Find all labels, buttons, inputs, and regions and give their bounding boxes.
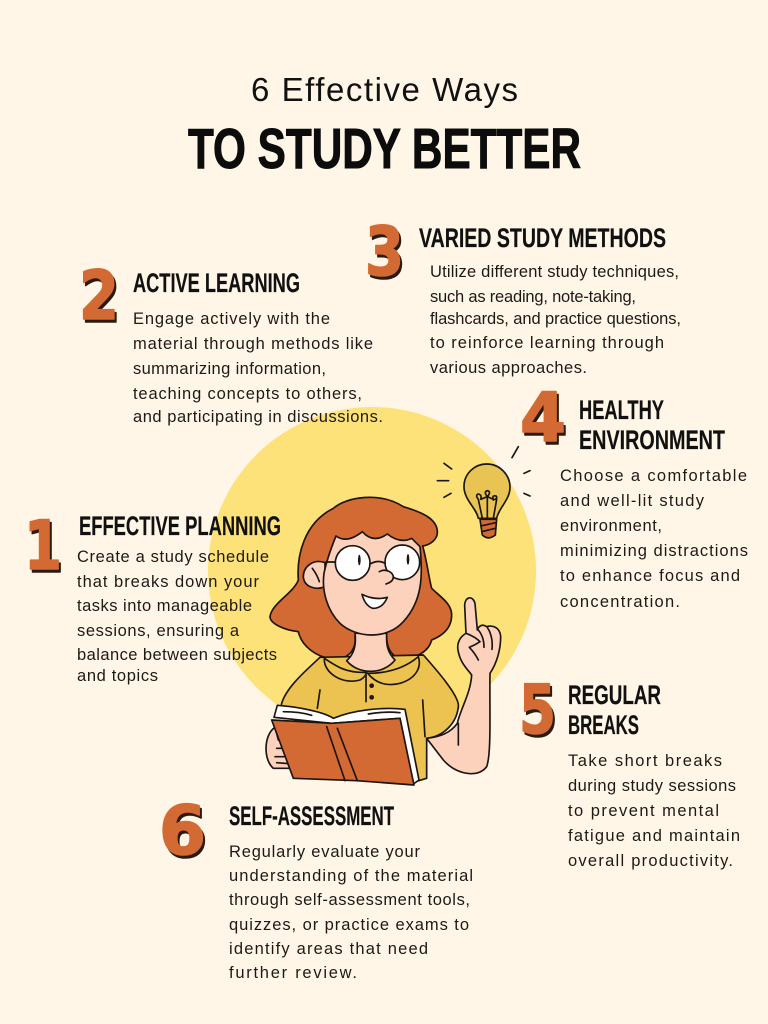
title: TO STUDY BETTER (188, 117, 581, 181)
text 1: balance between subjects (77, 646, 277, 664)
number 3: 3 (365, 213, 404, 292)
heading 2: ACTIVE LEARNING (133, 268, 300, 298)
neck (347, 633, 395, 671)
text 1: that breaks down your (77, 573, 260, 591)
face (323, 532, 421, 635)
number 2: 2 (81, 260, 121, 339)
text 6 (229, 843, 473, 982)
number 1: 1 (24, 507, 62, 586)
number 6: 6 (159, 792, 206, 871)
section 4: healthy environment (520, 379, 748, 611)
glasses (335, 546, 370, 580)
text 2: teaching concepts to others, (133, 385, 362, 403)
number 6: 6 (161, 795, 208, 874)
yellow background circle (208, 407, 536, 735)
text 1: tasks into manageable (77, 597, 252, 615)
text 2 (133, 310, 383, 426)
text 6: further review. (229, 964, 357, 982)
text 3: Utilize different study techniques, (430, 263, 679, 281)
text 6: understanding of the material (229, 867, 473, 885)
heading 4: HEALTHY (579, 395, 664, 425)
text 5: during study sessions (568, 777, 736, 795)
text 4: environment, (560, 517, 662, 535)
text 5: to prevent mental (568, 802, 719, 820)
section 6: self-assessment (159, 792, 473, 982)
text 6: quizzes, or practice exams to (229, 916, 469, 934)
nose (379, 570, 393, 584)
book cover (272, 718, 414, 785)
number 4: 4 (522, 382, 568, 461)
number 3: 3 (367, 216, 406, 295)
title: 6 Effective Ways (251, 71, 518, 108)
text 6: through self-assessment tools, (229, 891, 470, 909)
shirt (280, 655, 458, 783)
heading 4 (579, 395, 725, 455)
book pages (274, 705, 419, 784)
section 1: effective planning (24, 507, 281, 685)
number 5: 5 (519, 671, 556, 750)
text 1: and topics (77, 667, 158, 685)
text 4: to enhance focus and (560, 567, 740, 585)
heading 6: SELF-ASSESSMENT (229, 801, 394, 831)
section 2: active learning (79, 257, 383, 426)
heading 3: VARIED STUDY METHODS (419, 223, 666, 253)
section 5: regular breaks (519, 671, 740, 870)
text 5 (568, 752, 740, 870)
icon: light bulb (437, 447, 530, 538)
text 4: minimizing distractions (560, 542, 748, 560)
shirt details (317, 675, 425, 737)
text 3: such as reading, note-taking, (430, 288, 636, 306)
text 3 (430, 263, 681, 377)
collar (324, 657, 419, 685)
mouth (362, 594, 387, 608)
text 3: to reinforce learning through (430, 334, 664, 352)
number 2: 2 (79, 257, 119, 336)
text 4: and well-lit study (560, 492, 705, 510)
raised arm and hand (427, 598, 501, 774)
ear (303, 561, 325, 588)
text 2: and participating in discussions. (133, 408, 383, 426)
text 2: material through methods like (133, 335, 373, 353)
text 4: Choose a comfortable (560, 467, 747, 485)
text 6: Regularly evaluate your (229, 843, 420, 861)
number 4: 4 (520, 379, 566, 458)
text 5: Take short breaks (568, 752, 722, 770)
text 4 (560, 467, 748, 611)
text 5: fatigue and maintain (568, 827, 740, 845)
text 3: flashcards, and practice questions, (430, 310, 681, 328)
text 5: overall productivity. (568, 852, 733, 870)
text 1 (77, 548, 277, 685)
section 3: varied study methods (365, 213, 681, 377)
text 6: identify areas that need (229, 940, 428, 958)
hair (270, 497, 452, 659)
bang fill line (312, 568, 319, 582)
text 4: concentration. (560, 593, 680, 611)
text 1: sessions, ensuring a (77, 622, 240, 640)
heading 5: REGULAR (568, 680, 661, 710)
illustration: student with book and raised finger (266, 497, 501, 785)
heading 5: BREAKS (568, 710, 639, 740)
text 2: Engage actively with the (133, 310, 330, 328)
number 1: 1 (26, 510, 64, 589)
text 3: various approaches. (430, 359, 587, 377)
heading 1: EFFECTIVE PLANNING (79, 511, 281, 541)
text 2: summarizing information, (133, 360, 326, 378)
finger lines (458, 627, 492, 745)
text 1: Create a study schedule (77, 548, 269, 566)
number 5: 5 (521, 674, 558, 753)
heading 5 (568, 680, 661, 740)
title (188, 71, 581, 181)
left hand (266, 727, 301, 768)
